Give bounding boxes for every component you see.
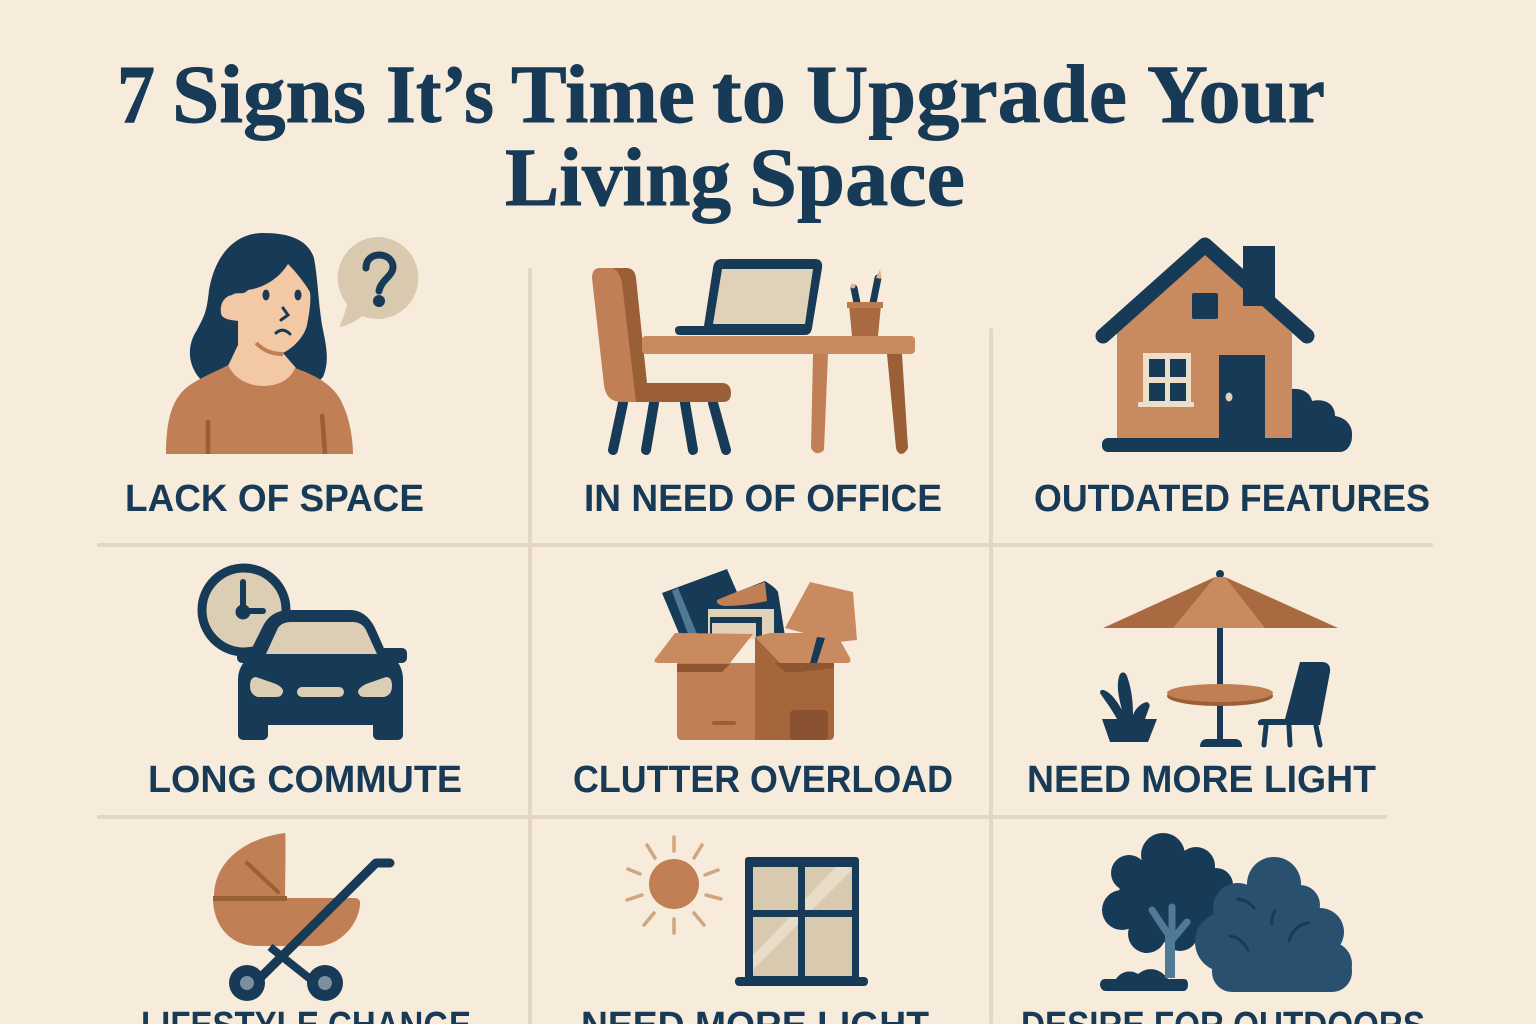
title: Time xyxy=(511,48,695,140)
label: in need of office: IN NEED OF OFFICE xyxy=(584,478,942,520)
title: Upgrade xyxy=(806,48,1127,140)
icon: cluttered moving box xyxy=(654,569,857,740)
label: need more light (patio): NEED MORE LIGHT xyxy=(1027,759,1376,801)
icon: clock and car xyxy=(202,568,407,740)
title xyxy=(117,48,1325,223)
icon: trees and bush xyxy=(1100,833,1352,992)
icon: baby stroller xyxy=(213,833,390,1001)
label: long commute: LONG COMMUTE xyxy=(148,759,462,801)
title: to xyxy=(712,48,786,140)
label: clutter overload: CLUTTER OVERLOAD xyxy=(573,759,953,801)
title: Living xyxy=(505,131,731,223)
icon: patio umbrella, table and chair xyxy=(1100,570,1338,747)
label: outdated features: OUTDATED FEATURES xyxy=(1034,478,1430,520)
icon: confused woman with question bubble xyxy=(166,233,418,454)
title: Signs xyxy=(172,48,366,140)
icon: sun and window xyxy=(627,837,868,986)
icon: desk, chair and laptop xyxy=(592,259,915,454)
title: Your xyxy=(1147,48,1325,140)
title: Space xyxy=(749,131,965,223)
icon: house xyxy=(1102,245,1352,452)
title: 7 xyxy=(117,48,155,140)
label: lack of space: LACK OF SPACE xyxy=(125,478,424,520)
title: It’s xyxy=(386,48,494,140)
